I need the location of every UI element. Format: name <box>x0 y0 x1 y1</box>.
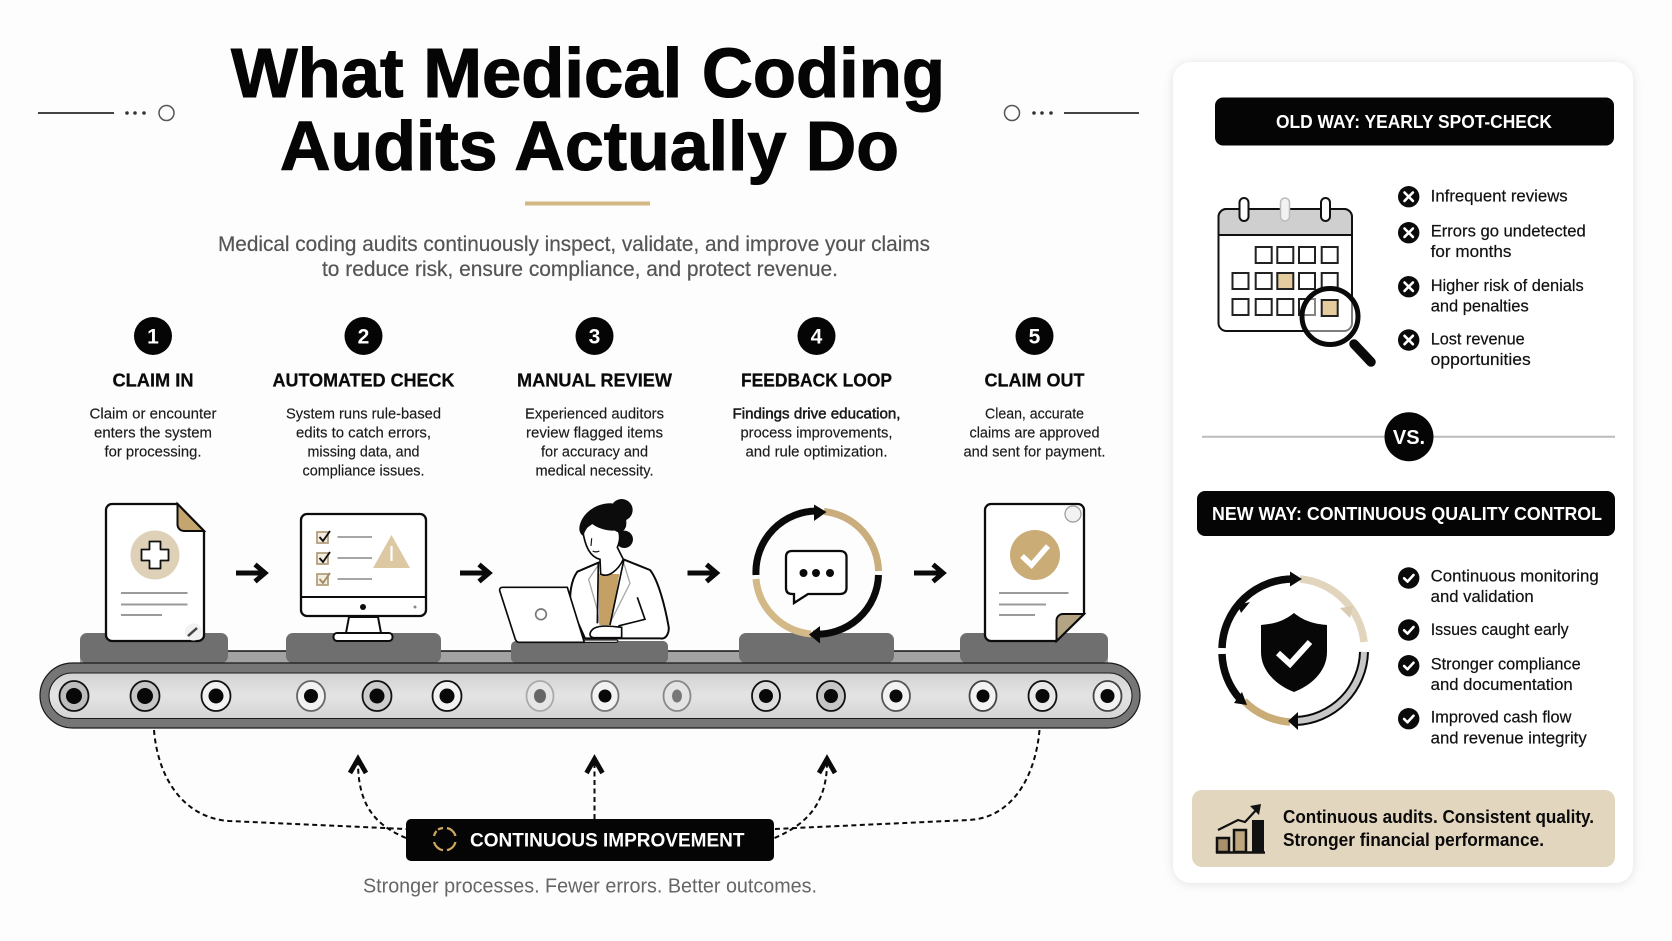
title ornament left <box>38 106 174 120</box>
belt rollers <box>60 681 1122 711</box>
step 2: automated check: compliance issues. <box>302 463 424 480</box>
new way header: NEW WAY: CONTINUOUS QUALITY CONTROL <box>1212 503 1602 524</box>
gold title rule <box>525 202 650 206</box>
vs divider <box>1202 412 1615 461</box>
step 5: claim out: claims are approved <box>970 425 1100 442</box>
old way list: Higher risk of denials <box>1431 277 1584 295</box>
step 2: automated check <box>272 317 454 480</box>
old way list: opportunities <box>1431 351 1531 369</box>
continuous improvement feedback arrows <box>154 730 1040 838</box>
step 5: claim out: 5 <box>1029 326 1041 348</box>
step 3: manual review <box>517 317 672 480</box>
old way list: Infrequent reviews <box>1431 188 1568 206</box>
lab coat <box>570 559 669 639</box>
step 5: claim out: and sent for payment. <box>964 444 1106 461</box>
new way list: and documentation <box>1431 676 1573 694</box>
icon: calendar with magnifier <box>1218 198 1371 362</box>
new way list: Improved cash flow <box>1431 709 1571 727</box>
step 5: claim out: CLAIM OUT <box>984 370 1085 390</box>
icon: approved document <box>985 504 1084 641</box>
panel: old vs new comparison <box>1173 62 1633 883</box>
step 1: claim in <box>90 317 216 461</box>
icon: shield in cycle <box>1222 572 1364 730</box>
face <box>583 520 623 575</box>
subtitle: to reduce risk, ensure compliance, and protect revenue. <box>322 258 838 281</box>
step 2: automated check: missing data, and <box>308 444 420 461</box>
laptop <box>500 587 584 642</box>
new way list <box>1398 567 1599 747</box>
step 4: feedback loop <box>732 317 900 461</box>
icon: auditor at laptop <box>500 499 669 642</box>
step 1: claim in: Claim or encounter <box>90 406 216 423</box>
step 3: manual review: review flagged items <box>526 425 663 442</box>
step 5: claim out <box>964 317 1106 461</box>
old way list: and penalties <box>1431 298 1529 316</box>
vs divider: VS. <box>1393 427 1425 449</box>
step 4: feedback loop: Findings drive education, <box>732 406 900 423</box>
old way list: for months <box>1431 243 1511 261</box>
arrowheads <box>350 759 835 773</box>
step 3: manual review: for accuracy and <box>541 444 648 461</box>
step 2: automated check: System runs rule-based <box>286 406 441 423</box>
callout: conclusion: Continuous audits. Consistent quality. <box>1283 807 1594 827</box>
hand <box>590 626 622 638</box>
new way list: Stronger compliance <box>1431 655 1581 673</box>
subtitle: Medical coding audits continuously inspect, validate, and improve your claims <box>218 233 930 256</box>
step 4: feedback loop: FEEDBACK LOOP <box>741 370 892 390</box>
step 3: manual review: medical necessity. <box>536 463 654 480</box>
arrow 3 to 4 <box>688 564 716 582</box>
new way list: and validation <box>1431 588 1534 606</box>
closing tagline: Stronger processes. Fewer errors. Better outcomes. <box>363 876 817 898</box>
icon: monitor with checklist <box>301 514 426 641</box>
arrow 1 to 2 <box>236 564 265 582</box>
old way header: OLD WAY: YEARLY SPOT-CHECK <box>1276 111 1553 132</box>
step 1: claim in: CLAIM IN <box>112 370 194 390</box>
old way header <box>1215 98 1614 146</box>
continuous improvement label <box>406 819 774 861</box>
arrow 4 to 5 <box>914 564 943 582</box>
step 3: manual review: Experienced auditors <box>525 406 664 423</box>
new way list: Continuous monitoring <box>1431 568 1599 586</box>
continuous improvement label: CONTINUOUS IMPROVEMENT <box>470 831 745 852</box>
old way list <box>1398 186 1586 369</box>
new way list: and revenue integrity <box>1431 729 1587 747</box>
step 1: claim in: for processing. <box>104 444 202 461</box>
hair bun <box>611 499 633 521</box>
step 2: automated check: 2 <box>358 326 369 348</box>
title: What Medical Coding <box>231 34 945 112</box>
conveyor belt <box>40 633 1140 728</box>
step 3: manual review: MANUAL REVIEW <box>517 370 672 390</box>
step 4: feedback loop: 4 <box>811 326 823 348</box>
subtitle <box>218 233 930 281</box>
step 1: claim in: enters the system <box>94 425 212 442</box>
icon: feedback loop <box>756 504 878 644</box>
icon: medical document <box>106 504 204 641</box>
new way list: Issues caught early <box>1431 621 1569 639</box>
old way list: Lost revenue <box>1431 330 1525 348</box>
step 1: claim in: 1 <box>147 326 159 348</box>
callout: conclusion <box>1192 790 1615 867</box>
step 5: claim out: Clean, accurate <box>985 406 1084 423</box>
step 4: feedback loop: and rule optimization. <box>746 444 888 461</box>
step 2: automated check: AUTOMATED CHECK <box>272 370 454 390</box>
step 3: manual review: 3 <box>589 326 600 348</box>
title ornament right <box>1004 106 1139 120</box>
new way header <box>1197 491 1615 536</box>
step 4: feedback loop: process improvements, <box>740 425 892 442</box>
icon: growth chart <box>1216 804 1265 852</box>
step 2: automated check: edits to catch errors, <box>296 425 431 442</box>
arrow 2 to 3 <box>460 564 489 582</box>
callout: conclusion: Stronger financial performance. <box>1283 830 1544 850</box>
title: Audits Actually Do <box>280 107 899 185</box>
old way list: Errors go undetected <box>1431 223 1586 241</box>
title <box>231 34 945 185</box>
icon: gold cycle <box>434 828 456 850</box>
